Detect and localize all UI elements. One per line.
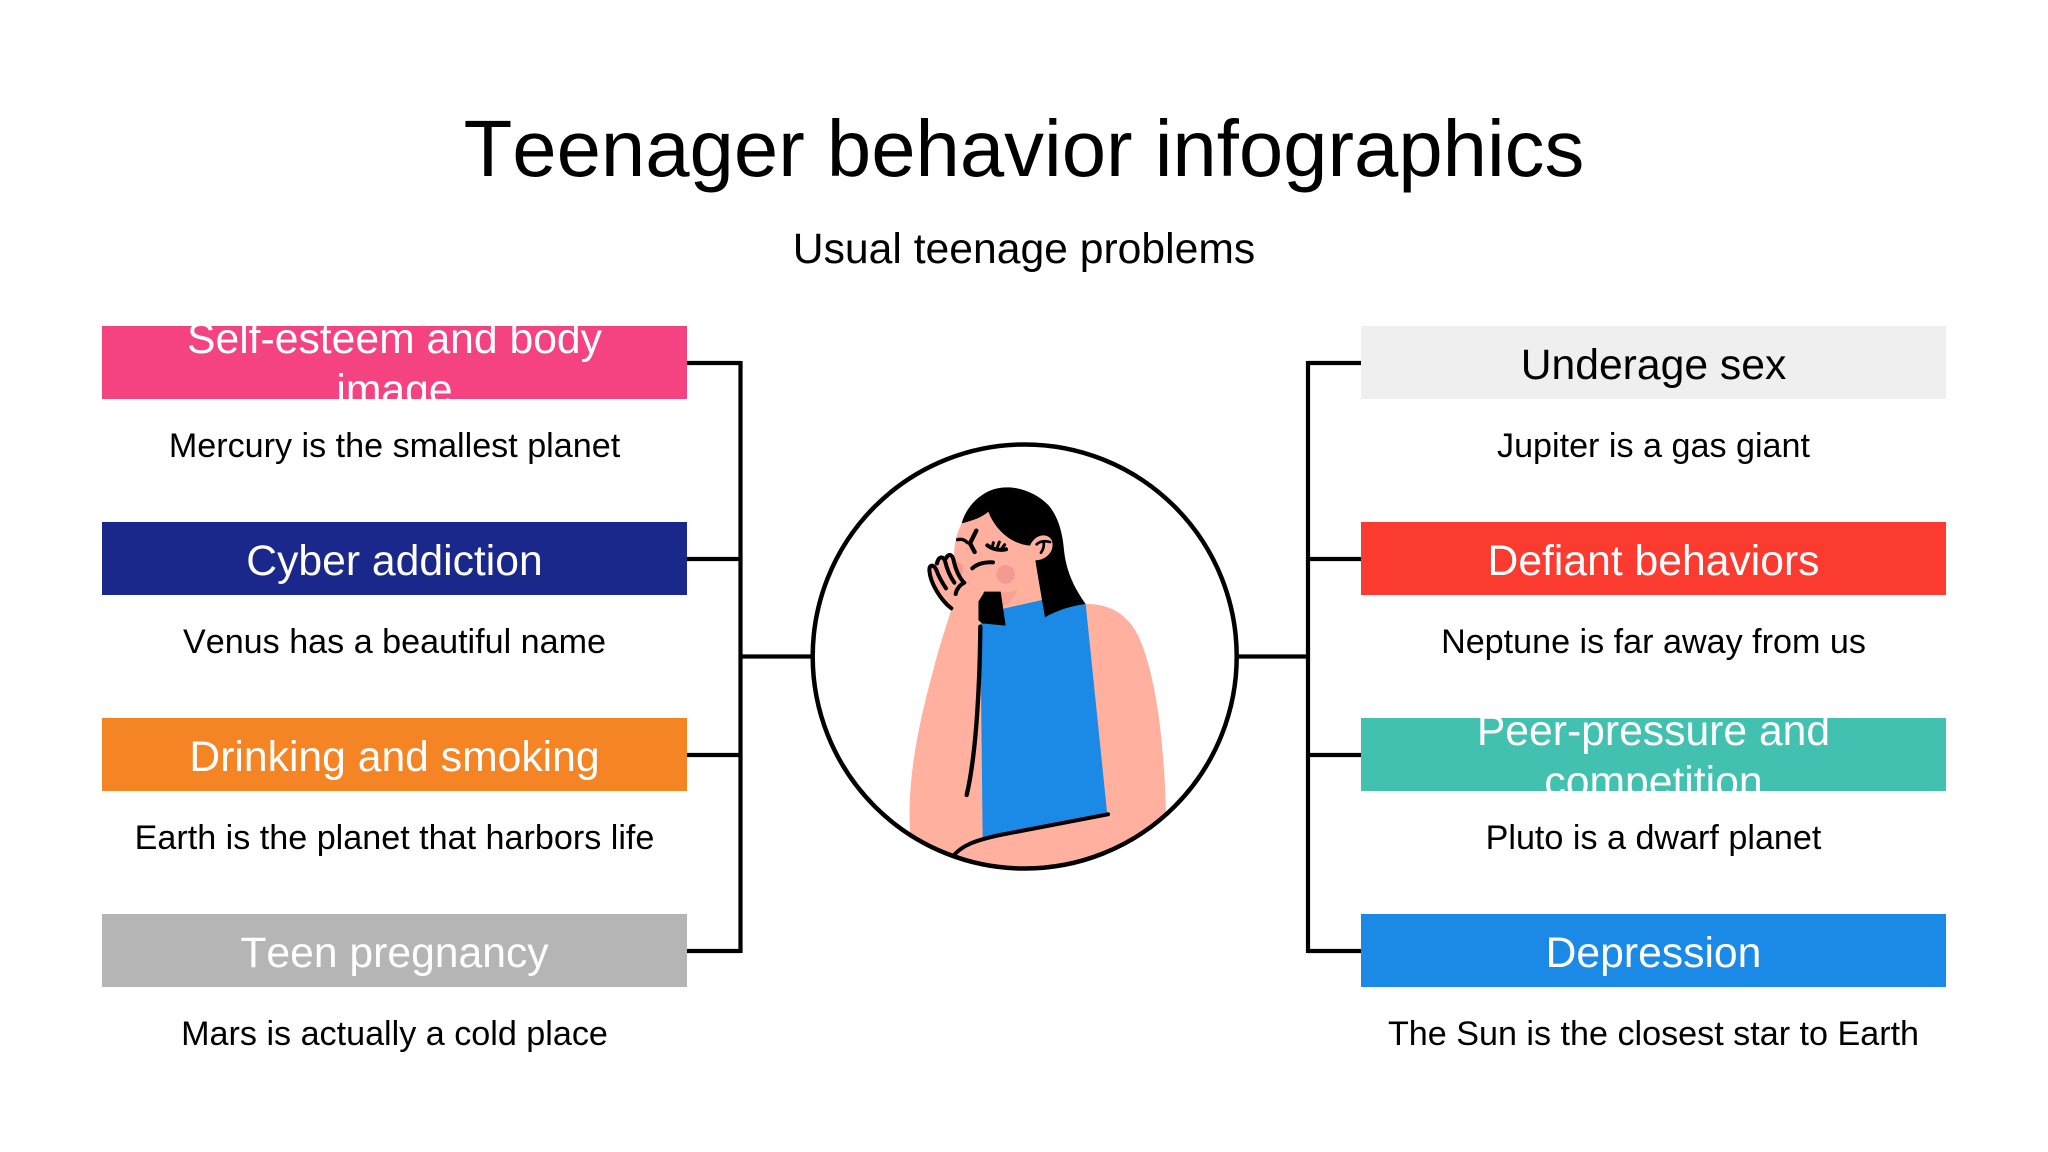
label bar: drinking and smoking: Drinking and smoking <box>189 732 600 780</box>
facial features <box>958 531 1006 568</box>
circle outline <box>813 444 1237 868</box>
label bar: teen pregnancy <box>102 914 687 987</box>
panel: peer-pressure and competition <box>1361 718 1946 857</box>
description: neptune: Neptune is far away from us <box>1441 623 1866 661</box>
description: jupiter: Jupiter is a gas giant <box>1497 427 1810 465</box>
label bar: teen pregnancy: Teen pregnancy <box>240 928 549 976</box>
ear <box>1030 535 1053 560</box>
description: mercury: Mercury is the smallest planet <box>169 427 620 465</box>
label bar: underage sex <box>1361 326 1946 399</box>
title: Teenager behavior infographics <box>464 104 1584 193</box>
description: mars: Mars is actually a cold place <box>181 1015 608 1053</box>
face <box>954 512 1036 592</box>
panel: depression <box>1361 914 1946 1053</box>
label bar: peer-pressure <box>1361 718 1946 791</box>
description: sun: The Sun is the closest star to Earth <box>1388 1015 1919 1053</box>
panel: self-esteem and body image <box>102 326 687 465</box>
label bar: drinking and smoking <box>102 718 687 791</box>
neck <box>1002 562 1042 608</box>
label bar: defiant behaviors: Defiant behaviors <box>1488 536 1819 584</box>
chin shadow <box>966 586 984 595</box>
arm outline <box>967 627 980 795</box>
neck shadow <box>1001 590 1017 606</box>
illustration: thoughtful teenager in circle <box>810 442 1239 871</box>
collar <box>978 592 1006 626</box>
panel: defiant behaviors <box>1361 522 1946 661</box>
description: earth: Earth is the planet that harbors life <box>135 819 654 857</box>
label bar: depression: Depression <box>1546 928 1761 976</box>
label bar: underage sex: Underage sex <box>1521 340 1786 388</box>
panel: cyber addiction <box>102 522 687 661</box>
description: venus: Venus has a beautiful name <box>183 623 606 661</box>
panel: teen pregnancy <box>102 914 687 1053</box>
hair <box>962 487 1086 617</box>
subtitle: Usual teenage problems <box>793 225 1255 273</box>
cheeks <box>996 565 1015 584</box>
label bar: defiant behaviors <box>1361 522 1946 595</box>
panel: underage sex <box>1361 326 1946 465</box>
forearm line <box>953 814 1108 857</box>
description: pluto: Pluto is a dwarf planet <box>1486 819 1821 857</box>
label bar: cyber addiction: Cyber addiction <box>246 536 543 584</box>
panel: drinking and smoking <box>102 718 687 857</box>
label bar: depression <box>1361 914 1946 987</box>
hand <box>929 555 984 630</box>
label bar: cyber addiction <box>102 522 687 595</box>
blue top <box>980 600 1107 839</box>
skin: arm, torso and forearm <box>910 598 1166 866</box>
